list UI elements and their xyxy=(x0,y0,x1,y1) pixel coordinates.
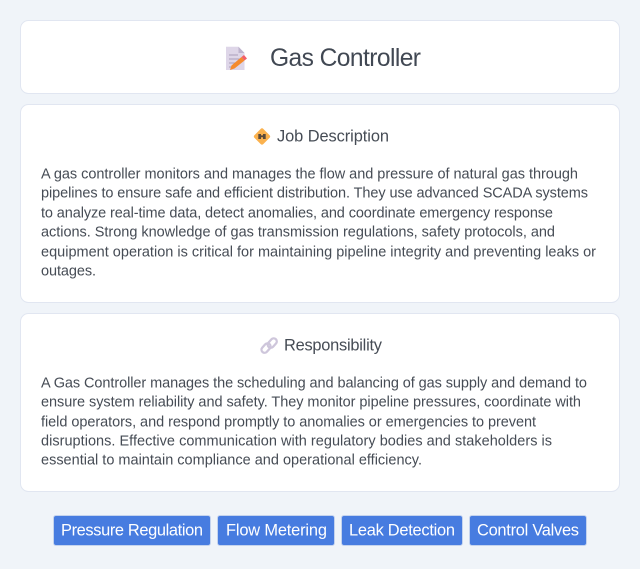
title text: Gas Controller xyxy=(270,45,421,72)
responsibility text: disruptions. Effective communication with regulatory bodies and stakeholders is xyxy=(41,434,552,450)
tag: flow metering xyxy=(218,516,334,546)
responsibility text xyxy=(41,376,587,469)
responsibility text: A Gas Controller manages the scheduling and balancing of gas supply and demand to xyxy=(41,376,587,392)
tag: pressure regulation: Pressure Regulation xyxy=(61,522,203,540)
tag: control valves: Control Valves xyxy=(477,522,579,540)
tags xyxy=(54,516,586,546)
panel: job description xyxy=(20,104,620,302)
icon: orange diamond xyxy=(253,128,271,145)
tag: leak detection xyxy=(342,516,462,546)
job description text: to analyze real-time data, detect anomalies, and coordinate emergency response xyxy=(41,206,553,222)
panel: responsibility xyxy=(20,314,620,492)
job description text: actions. Strong knowledge of gas transmission regulations, safety protocols, and xyxy=(41,224,555,240)
responsibility text: essential to maintain compliance and operational efficiency. xyxy=(41,453,422,469)
heading: responsibility: Responsibility xyxy=(284,337,383,355)
job description text: pipelines to ensure safe and efficient distribution. They use advanced SCADA systems xyxy=(41,186,588,202)
job description text xyxy=(41,166,596,280)
icon: chain link xyxy=(260,337,278,354)
responsibility text: ensure system reliability and safety. They monitor pipeline pressures, coordinate with xyxy=(41,395,581,411)
tag: flow metering: Flow Metering xyxy=(226,522,327,540)
job description text: equipment operation is critical for maintaining pipeline integrity and preventing leaks or xyxy=(41,244,596,260)
job description text: A gas controller monitors and manages the flow and pressure of natural gas through xyxy=(41,166,578,182)
responsibility text: field operators, and respond promptly to anomalies or emergencies to prevent xyxy=(41,414,536,430)
panel: title xyxy=(20,20,620,94)
tag: control valves xyxy=(470,516,586,546)
tag: pressure regulation xyxy=(54,516,210,546)
heading: job description: Job Description xyxy=(277,128,389,146)
icon: document with pencil xyxy=(226,47,247,70)
tag: leak detection: Leak Detection xyxy=(349,522,455,540)
job description text: outages. xyxy=(41,264,96,280)
